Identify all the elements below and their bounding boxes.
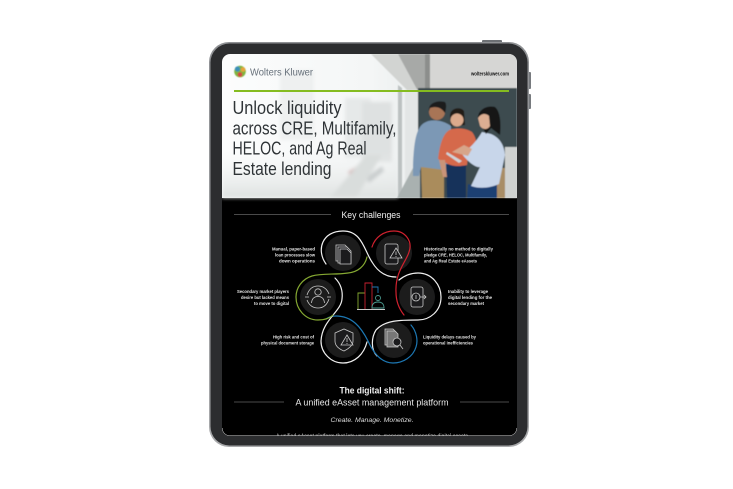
label: secondary market leverage: Inability to leverage	[448, 289, 488, 295]
title: across CRE, Multifamily,	[232, 118, 396, 138]
label: liquidity delays	[423, 335, 476, 346]
heading: the digital shift: The digital shift:	[340, 386, 404, 396]
label: no digital pledge	[424, 246, 493, 264]
tablet device frame	[209, 40, 531, 447]
label: physical storage: physical document storage	[261, 340, 314, 346]
challenge ribbon diagram	[296, 231, 441, 363]
label: paper processes	[272, 246, 315, 264]
heading: key challenges: Key challenges	[342, 210, 401, 220]
green rule	[234, 90, 509, 92]
tablet screen	[222, 54, 517, 440]
heading: the digital shift	[234, 386, 509, 408]
hero photo	[222, 54, 517, 198]
screen bottom edge	[222, 428, 517, 436]
label: secondary market leverage: digital lending for the	[448, 295, 492, 301]
label: liquidity delays: Liquidity delays caused by	[423, 334, 476, 340]
label: liquidity delays: operational inefficiencies	[423, 340, 473, 346]
icon: paper documents	[336, 245, 351, 264]
icon: shield with warning	[335, 329, 353, 351]
cut-off body text: A unified eAsset platform that lets you create, manage and monetize digital assets	[276, 434, 468, 440]
circle backgrounds	[300, 235, 435, 358]
label: physical storage	[261, 335, 314, 346]
label: no digital pledge: pledge CRE, HELOC, Multifamily,	[424, 252, 488, 258]
person: right woman	[467, 184, 497, 198]
icon: phone with warning	[385, 244, 402, 264]
icon: person with exchange arrows	[305, 286, 331, 308]
icon: phone with dollar	[411, 287, 426, 307]
tagline: Create. Manage. Monetize.	[330, 417, 414, 424]
label: secondary market leverage: secondary market	[448, 301, 484, 307]
label: no digital pledge: and Ag Real Estate eAssets	[424, 258, 477, 264]
logo: Wolters Kluwer	[250, 67, 313, 79]
label: paper processes: down operations	[279, 258, 315, 264]
icon: document with magnifier	[385, 329, 403, 349]
challenge labels	[237, 246, 493, 346]
label: secondary market players	[237, 289, 290, 307]
title: Estate lending	[232, 159, 332, 179]
label: secondary market players: to move to digital	[254, 301, 290, 307]
heading: the digital shift: A unified eAsset management platform	[296, 398, 448, 408]
label: secondary market leverage	[448, 289, 492, 307]
title: Unlock liquidity	[232, 98, 342, 118]
website url: wolterskluwer.com	[470, 72, 509, 78]
ribbon curves	[296, 231, 441, 363]
logo	[234, 66, 313, 79]
label: secondary market players: desire but lacked means	[241, 295, 289, 301]
person: middle woman	[446, 164, 466, 198]
label: physical storage: High risk and cost of	[273, 334, 314, 340]
label: secondary market players: Secondary market players	[237, 289, 289, 295]
icon: central bar chart with person	[357, 283, 385, 310]
title: HELOC, and Ag Real	[232, 138, 366, 158]
window frame and ceiling	[430, 54, 517, 89]
label: paper processes: loan processes slow	[275, 252, 315, 258]
person: man	[421, 167, 444, 198]
title	[232, 98, 396, 179]
icon: Wolters Kluwer globe	[234, 66, 246, 77]
label: no digital pledge: Historically no method to digitally	[424, 246, 493, 252]
label: paper processes: Manual, paper-based	[272, 246, 315, 252]
